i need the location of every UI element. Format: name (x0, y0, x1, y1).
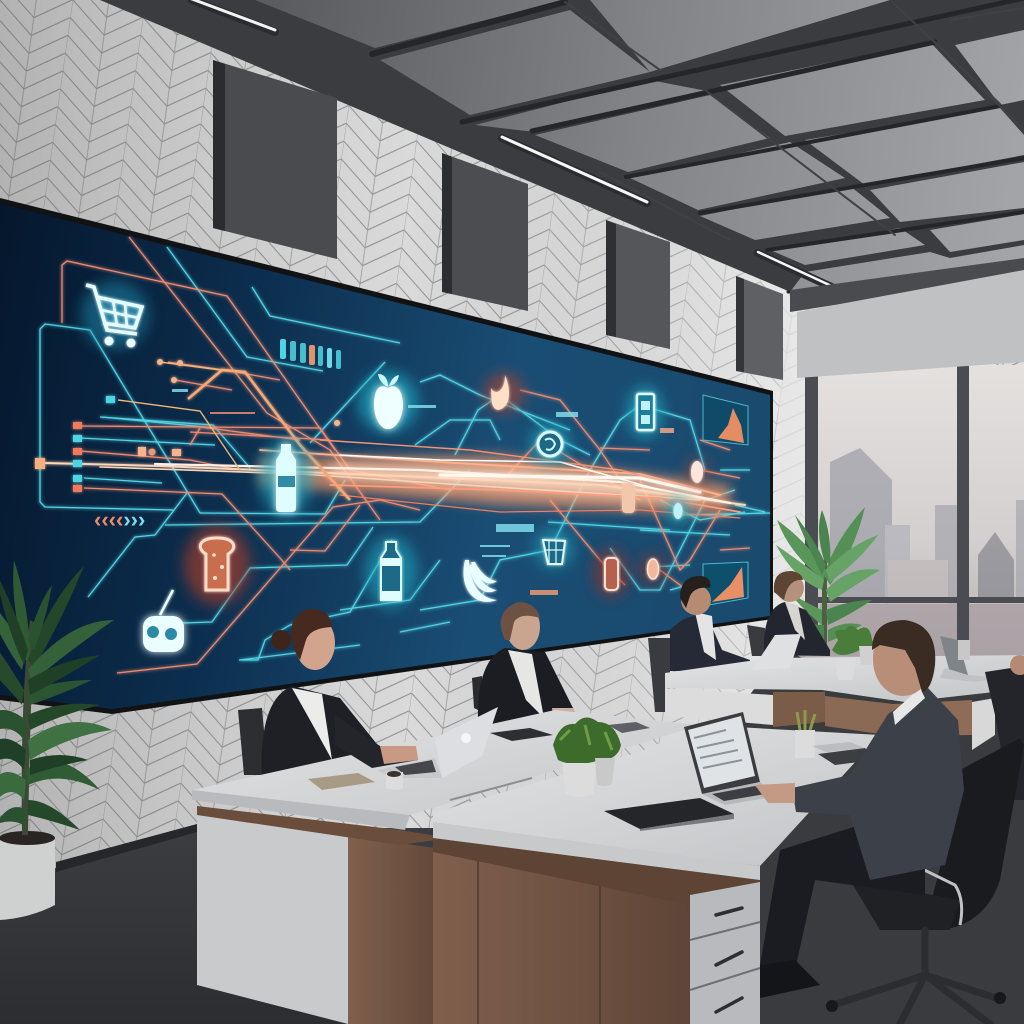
back desk plants (832, 626, 874, 680)
left desk white pedestal (197, 814, 348, 1024)
chart panel top right (703, 395, 748, 445)
city skyline (820, 448, 1024, 656)
back office plant (776, 507, 880, 645)
back desk base left (665, 688, 773, 725)
person: seated woman 1 (262, 609, 415, 780)
ceiling tiles (255, 0, 1024, 292)
back desk laptops (752, 634, 1000, 682)
plant pot (0, 838, 55, 920)
chevron arrows: ‹‹‹‹››› (94, 507, 145, 532)
head (873, 624, 933, 696)
icon: apple (358, 372, 418, 432)
left desk (192, 710, 700, 1024)
desk plant (553, 717, 621, 797)
icon: shopping cart (81, 281, 149, 349)
chart panel bottom right (703, 562, 748, 606)
skirting board (56, 824, 197, 872)
icon: robot (143, 590, 184, 652)
laptop woman 1 (377, 707, 498, 778)
person: seated woman 2 (478, 602, 574, 728)
icon: pastry (640, 554, 666, 584)
left floor plant (0, 560, 114, 920)
tablet on left desk (490, 728, 553, 741)
icon: toast column (622, 483, 635, 513)
front desk wood band (433, 838, 760, 905)
left endpoint node (35, 458, 45, 469)
hand (755, 783, 795, 803)
collar shirt (893, 688, 925, 725)
ceiling beams (372, 0, 1024, 292)
chair: woman 2 (472, 676, 482, 712)
back desk base right (825, 696, 893, 736)
orange peak line (188, 370, 350, 500)
display wall (0, 198, 773, 714)
front laptop (684, 712, 778, 805)
icon: bread (184, 525, 250, 605)
left desk wood underside (197, 806, 450, 845)
left desk wood side (348, 836, 450, 1024)
floor (0, 828, 450, 1024)
acoustic panels (213, 60, 783, 380)
hand of seated woman 1 (380, 746, 418, 764)
circuit lines cyan (40, 247, 770, 660)
window frames (805, 365, 1024, 655)
closed black folder (604, 798, 734, 831)
person: front man (755, 620, 964, 998)
icon: round badge (530, 424, 570, 464)
tick lines in amber (118, 362, 240, 470)
icon: jar (594, 549, 628, 597)
arm of seated woman 1 (335, 715, 418, 768)
icon: milk bottle (365, 536, 417, 608)
notebook and mug (308, 771, 403, 790)
ceiling lights (192, 0, 838, 290)
front desk top (433, 725, 880, 866)
jacket (792, 688, 964, 880)
legs (760, 825, 925, 970)
back chairs (648, 625, 765, 712)
icon: bottle (260, 440, 312, 516)
front chair (826, 738, 1024, 1024)
window (805, 365, 1024, 660)
icon: small apple (685, 458, 709, 486)
valance above window (797, 270, 1024, 378)
icon: basket (534, 528, 574, 568)
dark strip above valance (790, 258, 1024, 312)
right wall pier (772, 295, 805, 660)
chair base (830, 930, 1002, 1024)
chair arm (844, 836, 962, 925)
data streams (45, 440, 745, 518)
person: far right seated partial (985, 655, 1024, 800)
front desk wood side (433, 850, 690, 1024)
chair back (925, 738, 1024, 930)
tablet far (608, 722, 650, 733)
micro text marks (172, 389, 674, 595)
back desk base wood (773, 692, 825, 727)
front desk (433, 725, 880, 1024)
circuit lines orange (62, 237, 750, 673)
level bars (280, 339, 341, 369)
icon: package tag (627, 386, 663, 438)
icon: banana bunch (463, 560, 497, 602)
right room floor and lower wall (700, 655, 1024, 1024)
small desk items (795, 710, 875, 765)
chair: woman 1 (238, 708, 268, 775)
back desks (665, 655, 1024, 750)
icon: small badge (667, 497, 689, 525)
drawer unit (690, 882, 760, 1024)
left tick nodes (73, 359, 340, 492)
chair seat (850, 880, 960, 930)
plant stems and leaves (0, 560, 114, 835)
person: back left man (670, 576, 750, 671)
screen surface (0, 204, 770, 709)
ceiling (100, 0, 1024, 296)
person: back right woman (764, 571, 830, 656)
left desk top (192, 710, 700, 828)
icon: banana small (484, 373, 524, 413)
